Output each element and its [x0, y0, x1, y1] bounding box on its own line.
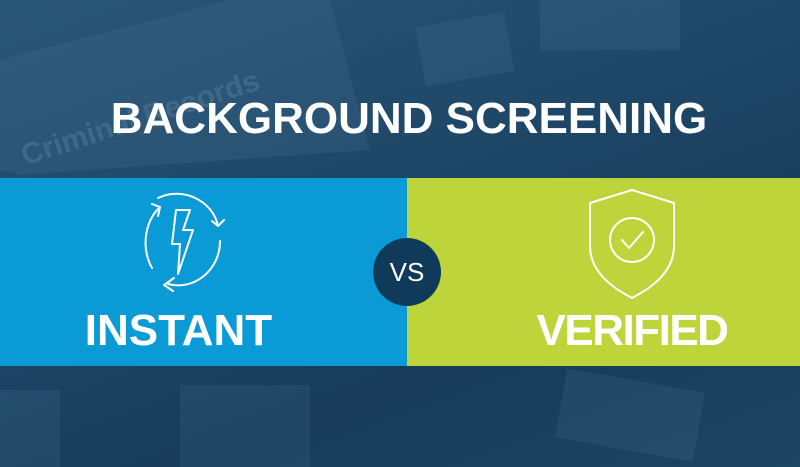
vs badge — [373, 238, 441, 306]
panel: instant — [0, 178, 407, 366]
icon: lightning with cycle arrows — [144, 192, 225, 292]
label: instant: INSTANT — [85, 306, 272, 355]
background photo shapes: Criminal Records — [17, 64, 264, 172]
panel: verified — [407, 178, 800, 366]
label: verified: VERIFIED — [537, 306, 727, 355]
vs badge: VS — [390, 257, 424, 287]
icon: shield with check — [589, 189, 675, 299]
title: BACKGROUND SCREENING — [111, 94, 707, 143]
